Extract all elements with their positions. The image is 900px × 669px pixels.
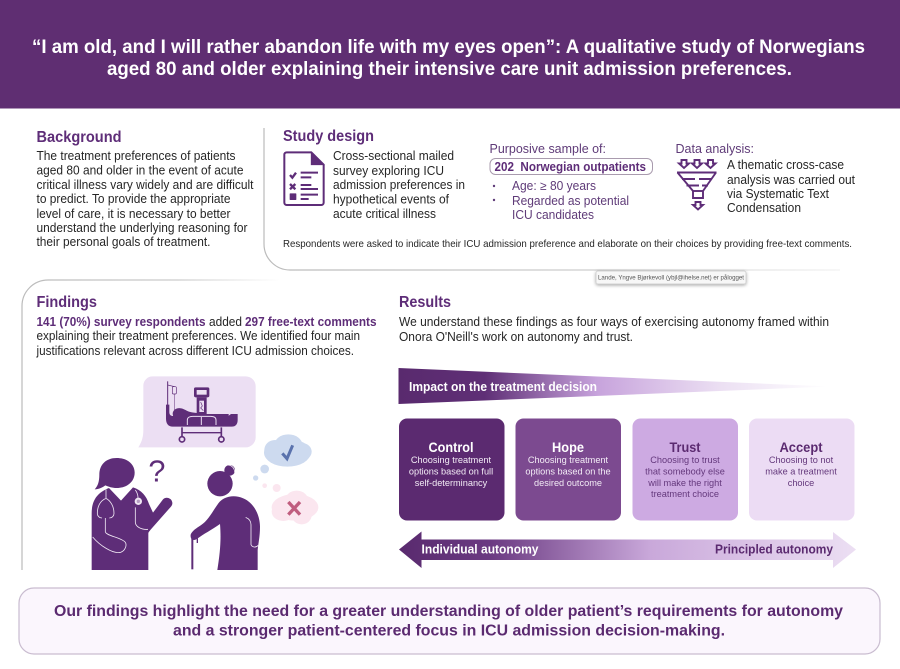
card: control: self-determinancy — [415, 478, 488, 488]
card: accept: Choosing to not — [769, 455, 834, 465]
purposive sample: Regarded as potential — [512, 194, 629, 208]
panel: findings — [22, 280, 377, 570]
background text — [36, 149, 254, 249]
purposive sample — [490, 141, 652, 222]
card: control: Control — [428, 439, 474, 455]
title: aged 80 and older explaining their intensive care unit admission preferences. — [107, 58, 792, 80]
card: control: Choosing treatment — [411, 455, 492, 465]
panel: results — [398, 294, 856, 568]
title: “I am old, and I will rather abandon life with my eyes open”: A qualitative study of Norwegians — [32, 36, 865, 58]
background text: critical illness vary widely and are difficult — [36, 178, 254, 192]
card: trust: Choosing to trust — [650, 455, 720, 465]
study description: admission preferences in — [333, 178, 465, 192]
card: trust: will make the right — [647, 478, 722, 488]
icon: funnel — [677, 160, 716, 210]
results text: We understand these findings as four ways of exercising autonomy framed within — [399, 315, 829, 329]
data analysis: Condensation — [727, 201, 801, 215]
heading: background: Background — [36, 129, 122, 146]
study description — [333, 149, 465, 221]
card: control — [399, 418, 504, 520]
study description: survey exploring ICU — [333, 164, 444, 178]
heading: study design: Study design — [283, 128, 374, 145]
data analysis: A thematic cross-case — [727, 158, 844, 172]
double arrow: individual to principled autonomy: Individual autonomy — [422, 542, 539, 556]
tooltip: Lande, Yngve Bjørkevoll (ybjl@ihelse.net) er pålogget — [598, 274, 744, 282]
conclusion box: and a stronger patient-centered focus in ICU admission decision-making. — [173, 622, 725, 640]
purposive sample: 202 Norwegian outpatients — [494, 160, 646, 174]
double arrow: individual to principled autonomy: Principled autonomy — [715, 542, 833, 556]
thought cloud: cross — [262, 483, 318, 524]
card: accept: Accept — [780, 439, 823, 455]
results text — [399, 315, 829, 344]
background text: aged 80 and older in the event of acute — [36, 164, 244, 178]
wedge: impact on the treatment decision: Impact on the treatment decision — [409, 380, 597, 394]
question mark: ? — [148, 455, 165, 489]
study description: hypothetical events of — [333, 192, 449, 206]
older patient figure — [191, 465, 260, 570]
purposive sample: Age: ≥ 80 years — [512, 179, 596, 193]
respondents note: Respondents were asked to indicate their ICU admission preference and elaborate on their choices by providing free-text comments. — [283, 239, 852, 250]
card: hope: desired outcome — [534, 478, 602, 488]
card: accept: choice — [788, 478, 814, 488]
conclusion box — [19, 588, 880, 654]
card: accept: make a treatment — [765, 466, 837, 476]
findings text: justifications relevant across different ICU admission choices. — [36, 344, 354, 358]
icon: survey document — [284, 152, 324, 205]
wedge: impact on the treatment decision — [398, 368, 830, 404]
findings text: 141 (70%) survey respondents — [36, 315, 206, 329]
background text: The treatment preferences of patients — [36, 149, 236, 163]
conclusion box: Our findings highlight the need for a greater understanding of older patient’s requirements for autonomy — [54, 603, 843, 620]
tooltip — [596, 271, 746, 284]
findings text — [36, 315, 377, 358]
card: accept — [749, 418, 854, 520]
panel: study design — [264, 128, 855, 270]
card: trust: that somebody else — [645, 466, 725, 476]
results text: Onora O'Neill's work on autonomy and trust. — [399, 330, 633, 344]
double arrow: individual to principled autonomy — [399, 532, 856, 568]
card: trust: Trust — [670, 439, 701, 455]
background text: their personal goals of treatment. — [36, 235, 210, 249]
data analysis: Data analysis: — [676, 141, 754, 156]
thought cloud: check — [253, 434, 312, 481]
title — [32, 36, 865, 80]
card: hope: options based on the — [525, 466, 611, 476]
card: hope — [516, 418, 621, 520]
speech bubble with ICU bed — [138, 376, 256, 447]
card: trust: treatment choice — [651, 489, 719, 499]
card: trust — [632, 418, 738, 520]
background text: level of care, it is necessary to better — [36, 207, 230, 221]
purposive sample: Purposive sample of: — [490, 141, 606, 156]
data analysis: analysis was carried out — [727, 173, 855, 187]
study description: Cross-sectional mailed — [333, 149, 454, 163]
findings text: 297 free-text comments — [245, 315, 377, 329]
heading: findings: Findings — [36, 294, 97, 311]
study description: acute critical illness — [333, 207, 436, 221]
doctor figure — [92, 458, 172, 570]
panel: background — [36, 129, 254, 249]
illustration: doctor and older patient — [92, 376, 318, 570]
background text: understand the underlying reasoning for — [36, 221, 248, 235]
heading: results: Results — [399, 294, 451, 311]
data analysis — [676, 141, 855, 215]
card: hope: Hope — [552, 439, 584, 455]
card: control: options based on full — [409, 466, 493, 476]
data analysis: via Systematic Text — [727, 187, 829, 201]
findings text: explaining their treatment preferences. We identified four main — [36, 329, 360, 343]
purposive sample: ICU candidates — [512, 208, 594, 222]
background text: to predict. To provide the appropriate — [36, 192, 231, 206]
header banner — [0, 0, 900, 108]
card: hope: Choosing treatment — [528, 455, 609, 465]
findings text: added — [209, 315, 242, 329]
